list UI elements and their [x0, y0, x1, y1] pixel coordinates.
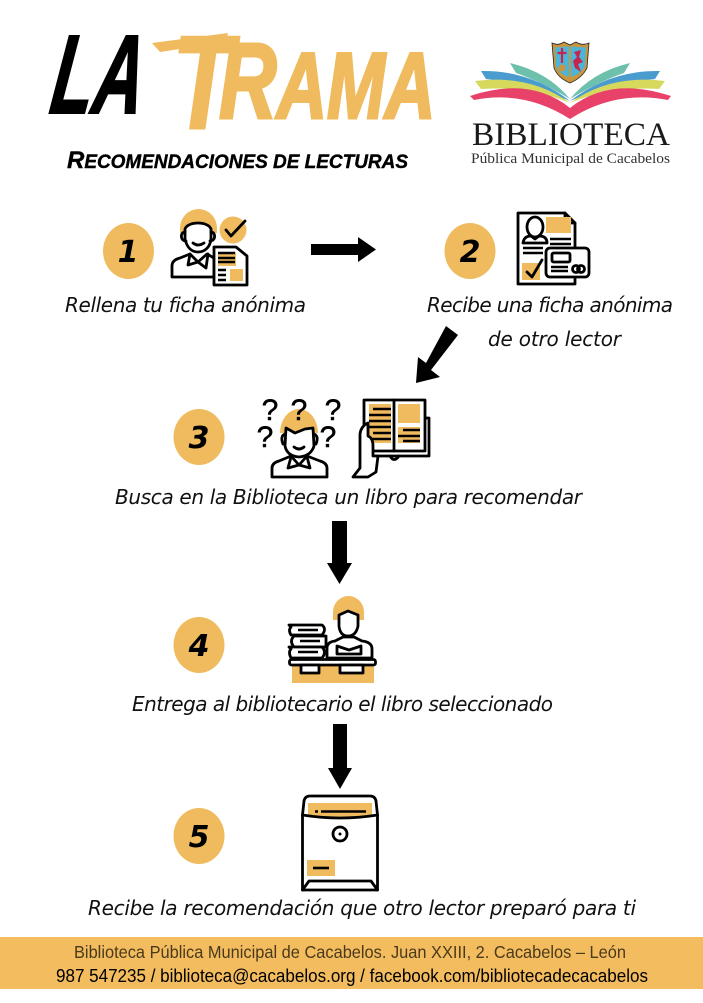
step 5	[88, 796, 636, 920]
label 2 line 2: de otro lector	[488, 327, 623, 351]
badge 5: 5	[189, 820, 209, 855]
step 3	[115, 394, 584, 509]
logo subtitle: Pública Municipal de Cacabelos	[471, 151, 670, 167]
footer band	[0, 937, 703, 989]
footer contacts: 987 547235 / biblioteca@cacabelos.org / facebook.com/bibliotecadecacabelos	[56, 966, 648, 986]
arrow: step 3 to 4	[327, 521, 352, 584]
badge 1	[103, 223, 154, 279]
icon: hand holding open book	[353, 400, 429, 477]
label 5: Recibe la recomendación que otro lector preparó para ti	[88, 896, 636, 920]
label 4: Entrega al bibliotecario el libro seleccionado	[132, 692, 553, 716]
step 1	[65, 209, 306, 317]
icon: person with question marks	[257, 394, 341, 477]
icon: person with question marks: ?	[320, 421, 336, 454]
arrow: step 4 to 5	[328, 724, 352, 789]
step 2	[427, 213, 673, 351]
icon: form and card	[518, 213, 589, 284]
arrow: step 1 to 2	[311, 237, 376, 262]
badge 4: 4	[188, 629, 209, 664]
subtitle: RECOMENDACIONES DE LECTURAS	[67, 147, 408, 174]
footer address: Biblioteca Pública Municipal de Cacabelos. Juan XXIII, 2. Cacabelos – León	[74, 942, 626, 962]
label 1: Rellena tu ficha anónima	[65, 293, 306, 317]
logo shield	[552, 42, 589, 83]
icon: person with question marks: ?	[291, 394, 307, 427]
icon: person with form	[172, 209, 247, 285]
title word: LA: LA	[45, 11, 154, 137]
label 3: Busca en la Biblioteca un libro para recomendar	[115, 485, 584, 509]
arrow: step 2 to 3	[416, 326, 458, 383]
icon: librarian at desk	[289, 596, 376, 683]
title word: TRAMA: AMA	[277, 33, 435, 138]
badge 2: 2	[460, 235, 480, 270]
logo wordmark: BIBLIOTECA	[472, 117, 670, 153]
badge 3: 3	[189, 421, 209, 456]
logo book ribbons	[470, 63, 671, 119]
badge 5	[174, 808, 224, 864]
icon: person with question marks: ?	[325, 394, 341, 427]
label 2 line 1: Recibe una ficha anónima	[427, 293, 673, 317]
icon: person with question marks: ?	[257, 421, 273, 454]
title word: TRAMA: R	[219, 21, 277, 142]
title: La Trama	[45, 9, 435, 156]
icon: envelope	[302, 796, 378, 890]
badge 2	[444, 223, 496, 279]
badge 1: 1	[118, 235, 138, 270]
badge 3	[174, 409, 224, 465]
library logo	[470, 42, 671, 167]
badge 4	[174, 617, 224, 673]
title word: TRAMA: T	[173, 9, 240, 156]
step 4	[132, 596, 553, 716]
icon: person with question marks: ?	[262, 394, 278, 427]
